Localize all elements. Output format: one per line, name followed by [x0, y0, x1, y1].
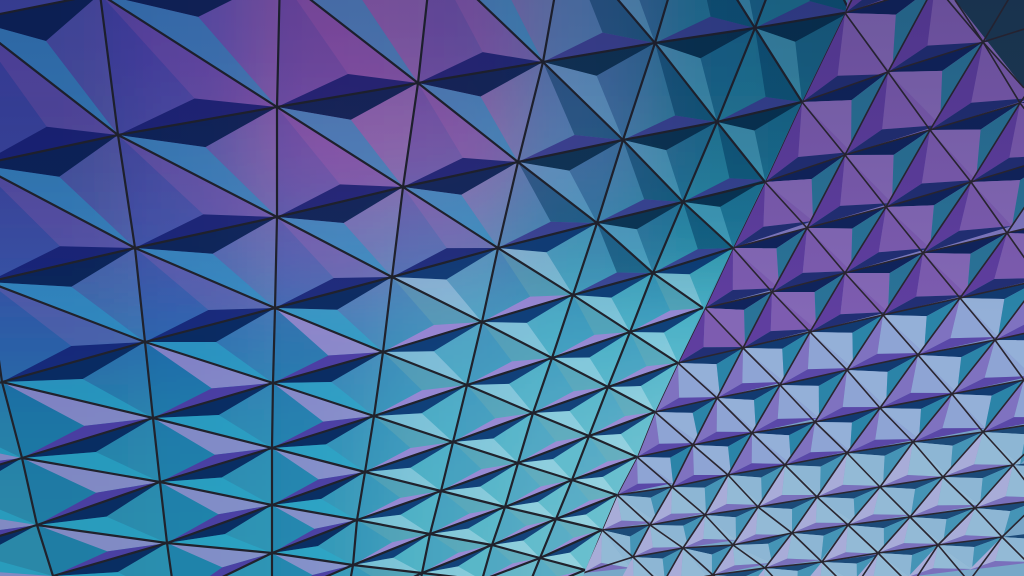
small facet panels [583, 0, 1024, 576]
base colour of right section [570, 0, 1024, 576]
dark corner panel, top right [955, 0, 1024, 88]
small facet section, right side [570, 0, 1024, 576]
mesh frame lines, right section [583, 0, 1024, 576]
